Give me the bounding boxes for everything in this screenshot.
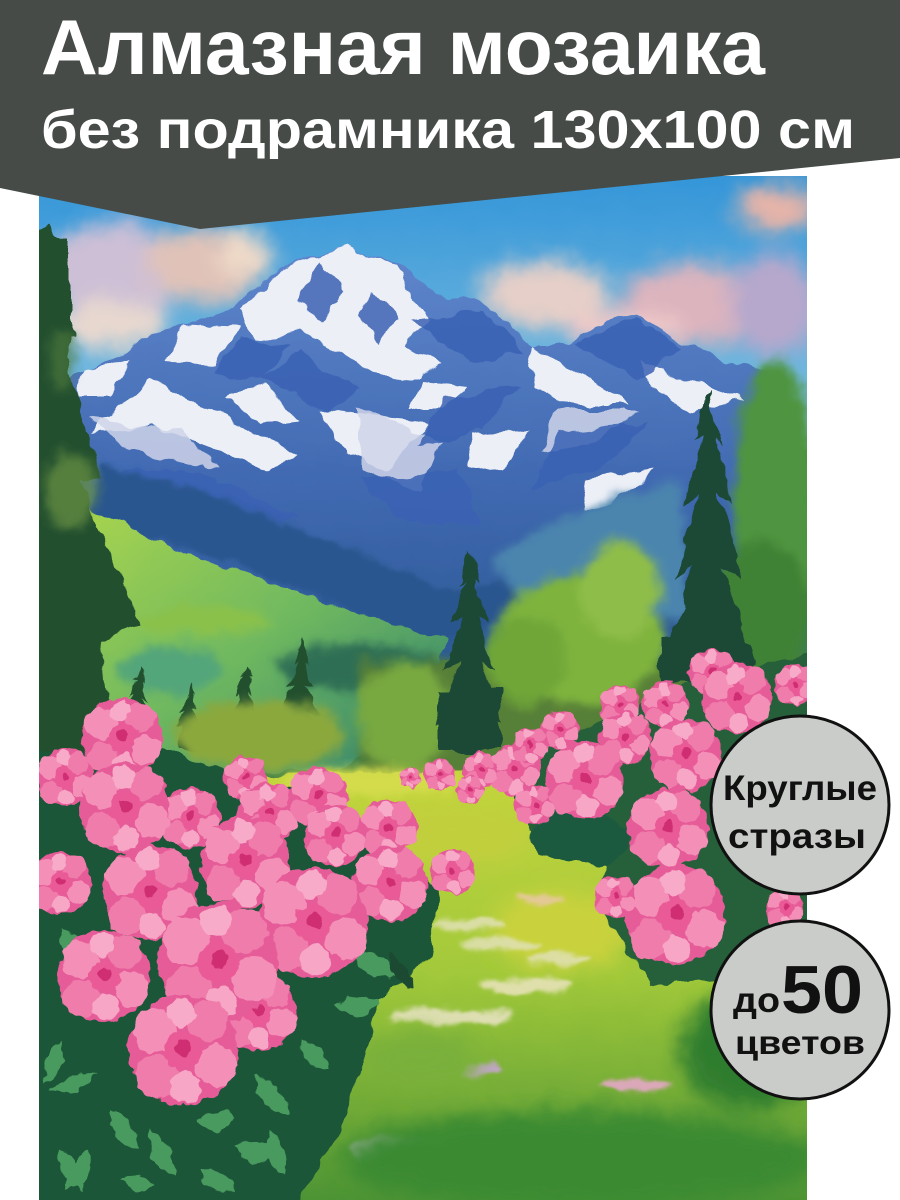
subtitle: без подрамника 130х100 см	[41, 100, 855, 160]
badge: round rhinestones: Круглые	[723, 769, 877, 808]
green deciduous trees right	[175, 360, 817, 790]
right flower bush foliage	[514, 652, 807, 986]
pink flowers right group	[400, 649, 816, 965]
clouds left	[45, 222, 273, 349]
painting base	[108, 450, 807, 778]
clouds right	[480, 184, 820, 357]
left flower bush foliage	[20, 750, 440, 1200]
green hill	[85, 505, 448, 770]
product photo: mountain painting	[20, 160, 830, 1200]
header banner	[0, 0, 900, 229]
meadow	[250, 770, 830, 1200]
badge: up to 50 colours: 50	[781, 952, 863, 1028]
pink flowers left group	[29, 698, 476, 1105]
mountains	[60, 248, 790, 660]
sky	[39, 176, 807, 450]
path patches	[350, 895, 670, 1162]
badge: up to 50 colours	[711, 921, 889, 1099]
darker grass foreground	[340, 990, 820, 1200]
badge: round rhinestones	[711, 716, 889, 894]
conifers centre and right	[437, 390, 752, 726]
badge: up to 50 colours: до	[733, 981, 780, 1020]
badge: round rhinestones: стразы	[728, 817, 866, 856]
badge: up to 50 colours: цветов	[735, 1024, 865, 1061]
leaves left bush	[44, 930, 415, 1191]
snow patches	[75, 248, 745, 510]
title: Алмазная мозаика	[41, 3, 766, 91]
lower blue ridge	[89, 462, 514, 636]
trees: left conifers	[20, 225, 324, 760]
